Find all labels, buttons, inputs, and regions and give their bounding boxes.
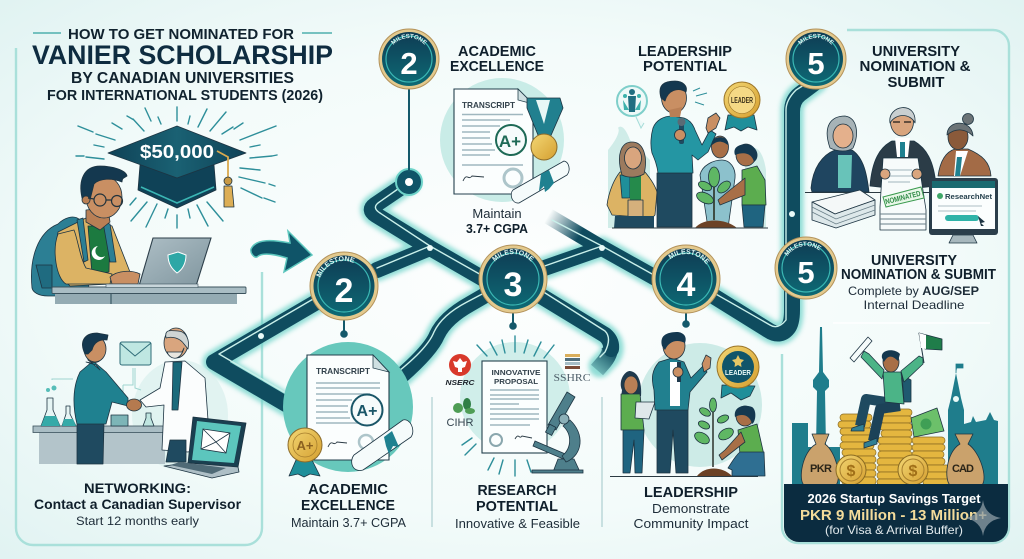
illustration: transcript lower [283, 342, 413, 477]
icon: NSERC logo [446, 354, 475, 387]
money bags: PKR [810, 463, 832, 475]
banner [784, 484, 1008, 542]
coin stacks [838, 409, 952, 485]
badge: milestone 2 lower: MILESTONE [316, 256, 355, 278]
badge: milestone 4: 4 [677, 266, 696, 304]
scroll [511, 161, 569, 203]
badge: milestone 5 top [786, 28, 846, 90]
banner text: PKR 9 Million - 13 Million+ [800, 507, 987, 524]
text: academic excellence lower: Maintain 3.7+ CGPA [291, 516, 407, 530]
icon: flasks [41, 398, 60, 426]
title: BY CANADIAN UNIVERSITIES [71, 70, 294, 87]
title: VANIER SCHOLARSHIP [32, 40, 333, 70]
badge: milestone 2 lower [310, 252, 378, 320]
illustration: transcript top [440, 78, 569, 203]
badge: milestone 3: MILESTONE [492, 249, 534, 262]
heading: university nomination top: NOMINATION & [860, 58, 971, 75]
icon: dollar coin right: $ [909, 463, 918, 480]
speaker [657, 173, 692, 227]
heading: leadership potential top [638, 43, 732, 75]
illustration: transcript top: A+ [499, 132, 521, 151]
speaker [657, 408, 688, 473]
heading: university nomination top: SUBMIT [888, 74, 944, 91]
icon: CIHR logo: CIHR [446, 417, 474, 429]
panel: nomination frame [847, 30, 1009, 345]
text: university nomination: Internal Deadline [864, 298, 965, 312]
icon: leader medal lower [717, 346, 759, 400]
kneeling kid [738, 424, 764, 455]
text: research potential: Innovative & Feasible [455, 516, 580, 531]
text: university nomination: UNIVERSITY [871, 253, 957, 269]
illustration: leadership top scene [607, 81, 768, 228]
text: research potential: POTENTIAL [476, 498, 558, 515]
badge: milestone 4 [652, 244, 720, 314]
badge: milestone 2 top: MILESTONE [390, 34, 428, 45]
scroll [352, 420, 413, 470]
badge: milestone 2 lower: 2 [335, 272, 353, 310]
icon: leader medal: LEADER [731, 96, 753, 105]
illustration: leadership lower scene [610, 332, 765, 477]
text: leadership lower: LEADERSHIP [644, 484, 738, 501]
badge: milestone 5 lower: 5 [797, 255, 815, 290]
illustration: handshake in lab [33, 328, 246, 478]
badge: milestone 2 top [378, 28, 440, 90]
title: FOR INTERNATIONAL STUDENTS (2026) [47, 88, 323, 104]
laptop [139, 238, 211, 286]
icon: dollar coin left [836, 455, 866, 485]
medal [527, 98, 563, 140]
text: networking [34, 480, 242, 528]
heading: academic excellence top: ACADEMIC [458, 43, 536, 60]
badge: milestone 5 top: MILESTONE [798, 34, 834, 45]
illustration: research proposal: PROPOSAL [494, 377, 538, 386]
badge: milestone 2 top: 2 [400, 46, 418, 81]
icon: monitor ResearchNet: ResearchNet [945, 192, 993, 201]
icon: NSERC logo: NSERC [446, 378, 475, 387]
envelope [120, 342, 151, 365]
icon: leader medal lower: LEADER [725, 368, 751, 377]
panel: savings target: CAD [952, 463, 974, 475]
icon: leader medal [724, 82, 760, 131]
text: maintain cgpa top [466, 206, 529, 236]
text: research potential [455, 482, 580, 531]
text: networking: NETWORKING: [84, 480, 191, 496]
table [39, 432, 165, 464]
connector: stems [341, 88, 689, 337]
man center [870, 141, 936, 188]
icon: dollar coin right [898, 455, 928, 485]
desk [55, 293, 237, 304]
cash [911, 408, 944, 437]
skyline [792, 327, 998, 485]
woman right [938, 149, 991, 176]
banner text: 2026 Startup Savings Target [808, 491, 981, 506]
illustration: research proposal [460, 336, 583, 476]
badge: milestone 5 top: 5 [807, 46, 825, 81]
graduate on coins [860, 399, 900, 426]
woman [607, 172, 657, 218]
banner text [800, 491, 987, 537]
icon: sparkle [965, 500, 1001, 536]
kids [700, 160, 735, 228]
text: research potential: RESEARCH [478, 482, 556, 499]
icon: graduation cap with $50,000 [76, 107, 277, 228]
heading: university nomination top: UNIVERSITY [872, 43, 960, 60]
text: leadership lower [634, 484, 749, 531]
illustration: student with laptop at desk [31, 166, 246, 304]
badge: milestone 5 lower: MILESTONE [784, 242, 822, 256]
badge: milestone 4: MILESTONE [668, 249, 710, 264]
girl [621, 371, 641, 398]
icon: SSHRC logo [554, 354, 591, 384]
title: HOW TO GET NOMINATED FOR [68, 26, 294, 43]
plant [713, 180, 715, 220]
head [86, 208, 110, 230]
icon: microscope [532, 392, 583, 473]
heading: university nomination top [860, 43, 971, 91]
text: maintain cgpa top: Maintain [472, 206, 522, 221]
banner text: (for Visa & Arrival Buffer) [825, 523, 963, 537]
text: networking: Contact a Canadian Supervisor [34, 496, 242, 512]
plant [712, 405, 714, 467]
panel: networking frame [16, 48, 262, 545]
text: university nomination: Complete by AUG/SEP [848, 284, 979, 298]
student [77, 422, 104, 464]
icon: A+ gold medal: A+ [297, 438, 314, 453]
heading: academic excellence top: EXCELLENCE [450, 58, 544, 75]
icon: backpack [31, 217, 90, 296]
icon: community bubble [617, 86, 647, 116]
illustration: transcript top: TRANSCRIPT [462, 100, 516, 110]
text: academic excellence lower: ACADEMIC [308, 481, 388, 498]
paper stacks [812, 190, 875, 214]
badge: milestone 5 lower [774, 236, 838, 300]
text: networking: Start 12 months early [76, 514, 199, 528]
text: leadership lower: Demonstrate [652, 501, 730, 516]
badge: milestone 3 [478, 244, 548, 314]
hands [126, 399, 142, 411]
heading: leadership potential top: POTENTIAL [643, 58, 727, 75]
icon: dollar coin left: $ [847, 463, 856, 480]
icon: CIHR logo [446, 398, 475, 429]
illustration: transcript lower: TRANSCRIPT [316, 366, 371, 376]
icon: monitor ResearchNet [929, 178, 998, 243]
panel: savings target [782, 327, 1009, 543]
text: academic excellence lower: EXCELLENCE [301, 497, 395, 514]
arrow [251, 231, 312, 272]
text: maintain cgpa top: 3.7+ CGPA [466, 221, 529, 236]
icon: SSHRC logo: SSHRC [554, 373, 591, 384]
icon: graduation cap with $50,000: $50,000 [140, 142, 214, 162]
woman left [811, 150, 869, 192]
heading: academic excellence top [450, 43, 544, 75]
badge: milestone 3: 3 [504, 266, 522, 304]
professor [140, 361, 208, 452]
text: university nomination [841, 253, 996, 312]
text: leadership lower: Community Impact [634, 516, 749, 531]
illustration: nomination committee [805, 108, 998, 243]
illustration: research proposal: INNOVATIVE [492, 368, 540, 377]
timeline path [214, 78, 816, 424]
illustration: transcript lower: A+ [357, 403, 377, 420]
icon: laptop with mail [164, 417, 246, 478]
title [32, 26, 333, 104]
money bags [801, 434, 838, 485]
heading: leadership potential top: LEADERSHIP [638, 43, 732, 60]
text: academic excellence lower [291, 481, 407, 530]
illustration: nomination committee: NOMINATED [884, 189, 922, 206]
jacket [57, 218, 130, 286]
text: university nomination: NOMINATION & SUBMIT [841, 267, 996, 283]
